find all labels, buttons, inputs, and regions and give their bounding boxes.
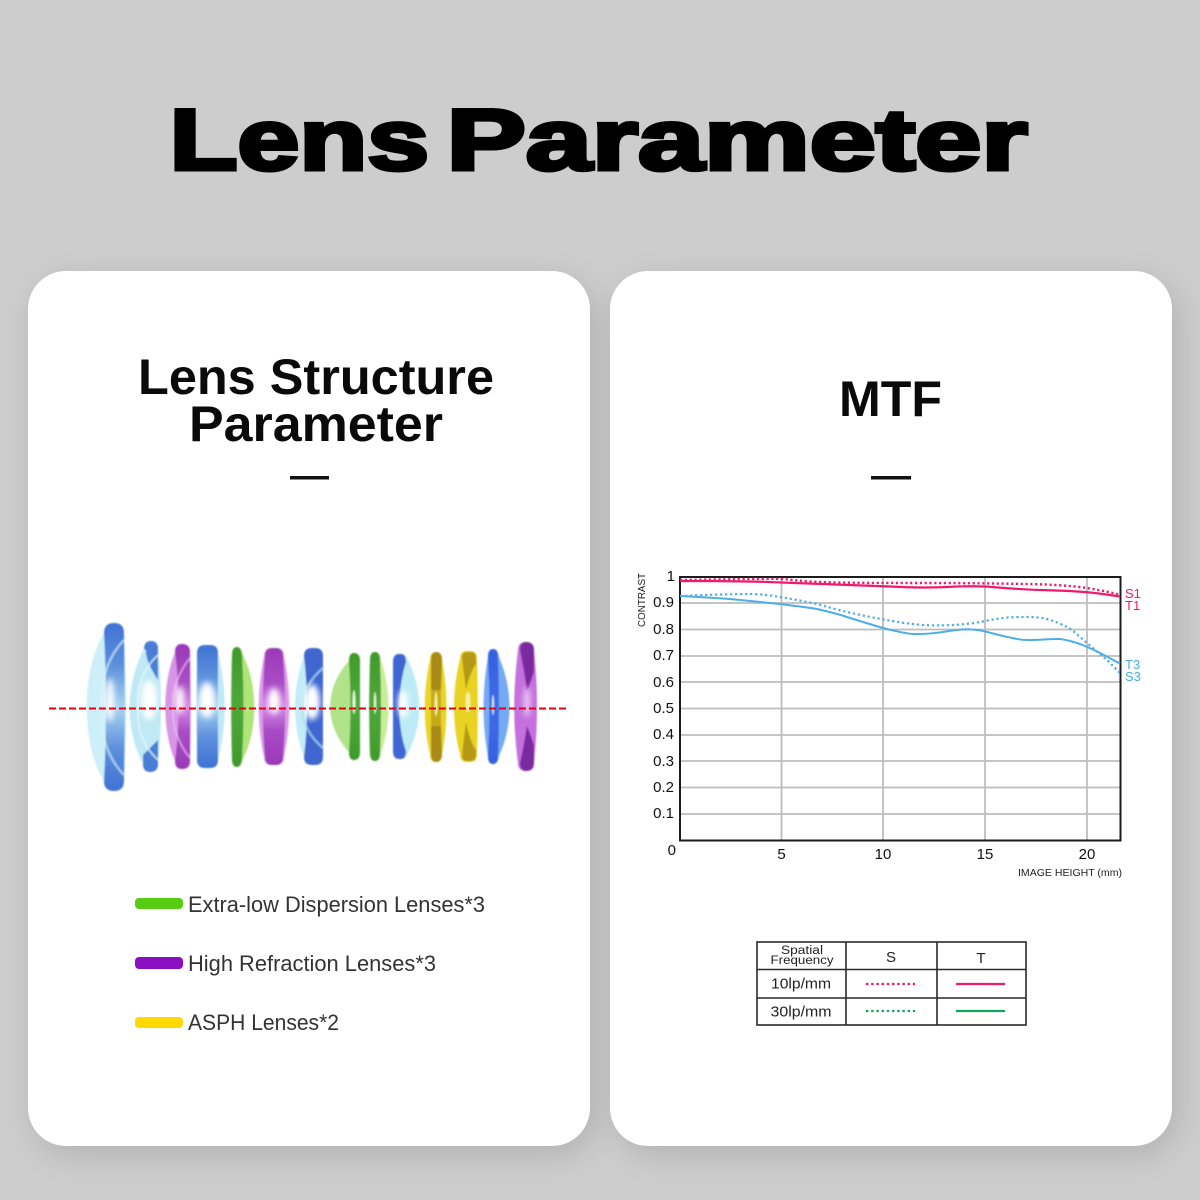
y axis tick labels: 0.4 bbox=[653, 726, 674, 743]
lens 11: yellow bbox=[425, 652, 446, 762]
curve labels: T1 bbox=[1125, 598, 1140, 613]
title bbox=[170, 92, 1028, 189]
curve: T3 30lp/mm tangential bbox=[680, 596, 1120, 664]
lens 5: green bbox=[231, 647, 254, 767]
lens 4: blue bbox=[196, 645, 225, 768]
legend: lens types bbox=[135, 892, 485, 1035]
y axis tick labels: 0.5 bbox=[653, 700, 674, 717]
y axis tick labels: 0.3 bbox=[653, 753, 674, 770]
lens 10: blue bbox=[393, 654, 419, 759]
x axis tick labels bbox=[777, 846, 1095, 863]
y axis tick labels: 1 bbox=[667, 568, 675, 585]
curve labels: S3 bbox=[1125, 669, 1141, 684]
heading: lens structure parameter: Lens Structure bbox=[138, 349, 494, 405]
y axis tick labels: 0.6 bbox=[653, 674, 674, 691]
y axis tick labels: 0.2 bbox=[653, 779, 674, 796]
curve labels: S1 bbox=[1125, 586, 1141, 601]
heading underline dash bbox=[290, 476, 329, 480]
heading: lens structure parameter bbox=[138, 349, 494, 452]
x axis tick labels: 10 bbox=[875, 846, 891, 863]
curve: S1 10lp/mm sagittal bbox=[680, 579, 1120, 595]
lens 14: purple bbox=[514, 642, 537, 771]
x axis tick labels: 20 bbox=[1079, 846, 1095, 863]
heading underline dash bbox=[871, 476, 911, 480]
heading: lens structure parameter: Parameter bbox=[189, 396, 443, 452]
table header text bbox=[770, 945, 986, 967]
legend table: spatial frequency bbox=[757, 942, 1026, 1025]
y axis tick labels: 0.1 bbox=[653, 805, 674, 822]
y axis tick labels: 0 bbox=[668, 842, 676, 859]
lens 9: green bbox=[369, 652, 388, 761]
x axis title: IMAGE HEIGHT (mm) bbox=[1018, 867, 1122, 879]
y axis tick labels: 0.9 bbox=[653, 594, 674, 611]
lens 7: blue bbox=[295, 648, 323, 765]
table header text: T bbox=[976, 950, 986, 967]
y axis tick labels: 0.7 bbox=[653, 647, 674, 664]
lens 1: blue bbox=[87, 623, 126, 791]
y axis tick labels bbox=[653, 568, 676, 859]
curve labels: T3 bbox=[1125, 657, 1140, 672]
curve: T1 10lp/mm tangential bbox=[680, 581, 1120, 596]
lens 2: blue bbox=[130, 641, 161, 772]
mtf line chart bbox=[636, 568, 1141, 879]
legend item: asph: ASPH Lenses*2 bbox=[188, 1010, 339, 1035]
x axis tick labels: 5 bbox=[777, 846, 786, 863]
curve labels bbox=[1125, 586, 1141, 684]
lens 8: green bbox=[330, 653, 360, 760]
title: Parameter bbox=[447, 92, 1028, 188]
lens 6: purple bbox=[259, 648, 289, 765]
y axis tick labels: 0.8 bbox=[653, 621, 674, 638]
x axis tick labels: 15 bbox=[977, 846, 993, 863]
heading: mtf: MTF bbox=[839, 371, 942, 427]
table row: 30lp/mm: 30lp/mm bbox=[770, 1004, 832, 1020]
panel: mtf bbox=[610, 271, 1178, 1155]
lens 12: yellow bbox=[454, 651, 478, 762]
y axis title: CONTRAST bbox=[636, 572, 648, 627]
lens 13: blue bbox=[484, 649, 510, 764]
curve: S3 30lp/mm sagittal bbox=[680, 594, 1120, 673]
optical axis dashed line bbox=[49, 708, 567, 710]
legend item: extra-low dispersion: Extra-low Dispersion Lenses*3 bbox=[188, 892, 485, 917]
lens stack diagram bbox=[49, 623, 567, 791]
panel: lens structure parameter bbox=[28, 271, 596, 1155]
legend item: high refraction: High Refraction Lenses*3 bbox=[188, 951, 436, 976]
title: Lens bbox=[170, 92, 429, 189]
table row: 10lp/mm: 10lp/mm bbox=[771, 976, 831, 992]
table header text: Frequency bbox=[770, 955, 834, 967]
chart frame bbox=[680, 577, 1120, 840]
lens 3: purple bbox=[165, 644, 191, 769]
table header text: S bbox=[886, 949, 896, 966]
table header text: Spatial bbox=[781, 945, 823, 957]
